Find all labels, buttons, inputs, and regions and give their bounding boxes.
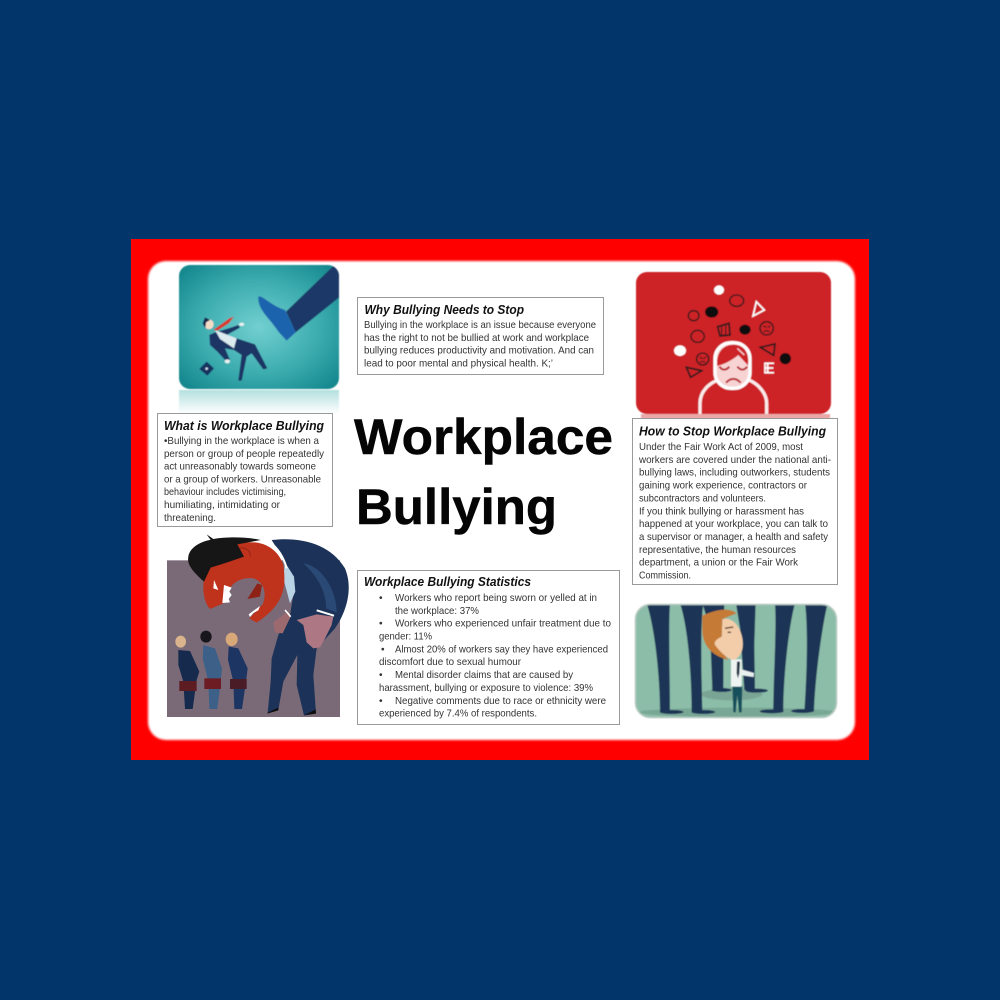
box: why bullying needs to stop: has the right to not be bullied at work and workplace xyxy=(364,333,589,344)
red frame xyxy=(131,239,869,760)
box: how to stop workplace bullying xyxy=(632,418,838,584)
worker 1 xyxy=(175,636,199,709)
box: workplace bullying statistics: experienced by 7.4% of respondents. xyxy=(379,709,537,720)
box: workplace bullying statistics: • xyxy=(379,670,383,681)
main title: Bullying xyxy=(356,479,557,535)
box: why bullying needs to stop: bullying reduces productivity and motivation. And can xyxy=(364,346,594,357)
box: what is workplace bullying: threatening. xyxy=(164,513,216,524)
image: businessman kicked by giant foot xyxy=(179,265,340,414)
box: why bullying needs to stop: Bullying in the workplace is an issue because everyone xyxy=(364,320,596,331)
box: what is workplace bullying: What is Workplace Bullying xyxy=(164,419,324,433)
boss body xyxy=(267,539,349,715)
box: what is workplace bullying: •Bullying in the workplace is when a xyxy=(164,436,319,447)
box: workplace bullying statistics: discomfort due to sexual humour xyxy=(379,657,522,668)
image: angry boss yelling at workers xyxy=(167,534,349,717)
box: workplace bullying statistics: Workplace Bullying Statistics xyxy=(364,575,531,589)
box: what is workplace bullying: or a group of workers. Unreasonable xyxy=(164,474,321,485)
box: how to stop workplace bullying: a supervisor or manager, a health and safety xyxy=(639,532,829,543)
box: workplace bullying statistics: • xyxy=(379,696,383,707)
box: how to stop workplace bullying: How to Stop Workplace Bullying xyxy=(639,424,826,438)
box: how to stop workplace bullying: Under the Fair Work Act of 2009, most xyxy=(639,442,803,453)
box: how to stop workplace bullying: If you think bullying or harassment has xyxy=(639,506,804,517)
box: why bullying needs to stop: Why Bullying Needs to Stop xyxy=(364,303,524,317)
box: what is workplace bullying: behaviour includes victimising, xyxy=(164,487,286,498)
box: how to stop workplace bullying: happened at your workplace, you can talk to xyxy=(639,519,828,530)
box: workplace bullying statistics: • xyxy=(379,619,383,630)
box: workplace bullying statistics: Workers who experienced unfair treatment due to xyxy=(395,619,611,630)
main title: Workplace xyxy=(354,409,613,465)
box: why bullying needs to stop xyxy=(358,298,604,374)
icons: speech bubbles, planes and faces xyxy=(674,285,791,377)
box: workplace bullying statistics: harassment, bullying or exposure to violence: 39% xyxy=(379,683,593,694)
box: workplace bullying statistics: • xyxy=(381,644,385,655)
box: workplace bullying statistics: Almost 20% of workers say they have experienced xyxy=(395,644,608,655)
worker 2 xyxy=(200,631,222,709)
worker 3 xyxy=(226,633,248,709)
box: what is workplace bullying xyxy=(158,414,332,526)
boss head xyxy=(188,534,284,623)
image: small man among giant legs xyxy=(635,603,838,718)
box: what is workplace bullying: humiliating, intimidating or xyxy=(164,500,281,511)
box: how to stop workplace bullying: department, a union or the Fair Work xyxy=(639,558,799,569)
box: workplace bullying statistics: the workplace: 37% xyxy=(395,606,479,617)
box: what is workplace bullying: act unreasonably towards someone xyxy=(164,462,316,473)
box: workplace bullying statistics: • xyxy=(379,593,383,604)
box: workplace bullying statistics: gender: 11% xyxy=(379,632,432,642)
box: workplace bullying statistics: Workers who report being sworn or yelled at in xyxy=(395,593,597,604)
box: what is workplace bullying: person or group of people repeatedly xyxy=(164,449,325,460)
box: workplace bullying statistics: Negative comments due to race or ethnicity were xyxy=(395,696,606,707)
box: how to stop workplace bullying: subcontractors and volunteers. xyxy=(639,493,766,504)
main title xyxy=(354,409,613,535)
box: how to stop workplace bullying: Commission. xyxy=(639,570,691,582)
box: how to stop workplace bullying: gaining work experience, contractors or xyxy=(639,481,808,492)
box: how to stop workplace bullying: workers are covered under the national anti- xyxy=(638,455,831,466)
image: stressed person with angry icons xyxy=(636,272,831,420)
box: workplace bullying statistics: Mental disorder claims that are caused by xyxy=(395,670,574,681)
box: workplace bullying statistics xyxy=(358,570,620,724)
box: how to stop workplace bullying: bullying laws, including outworkers, students xyxy=(639,468,830,479)
box: how to stop workplace bullying: representative, the human resources xyxy=(639,545,796,556)
box: why bullying needs to stop: lead to poor mental and physical health. K;’ xyxy=(364,358,553,370)
small man xyxy=(702,610,754,712)
